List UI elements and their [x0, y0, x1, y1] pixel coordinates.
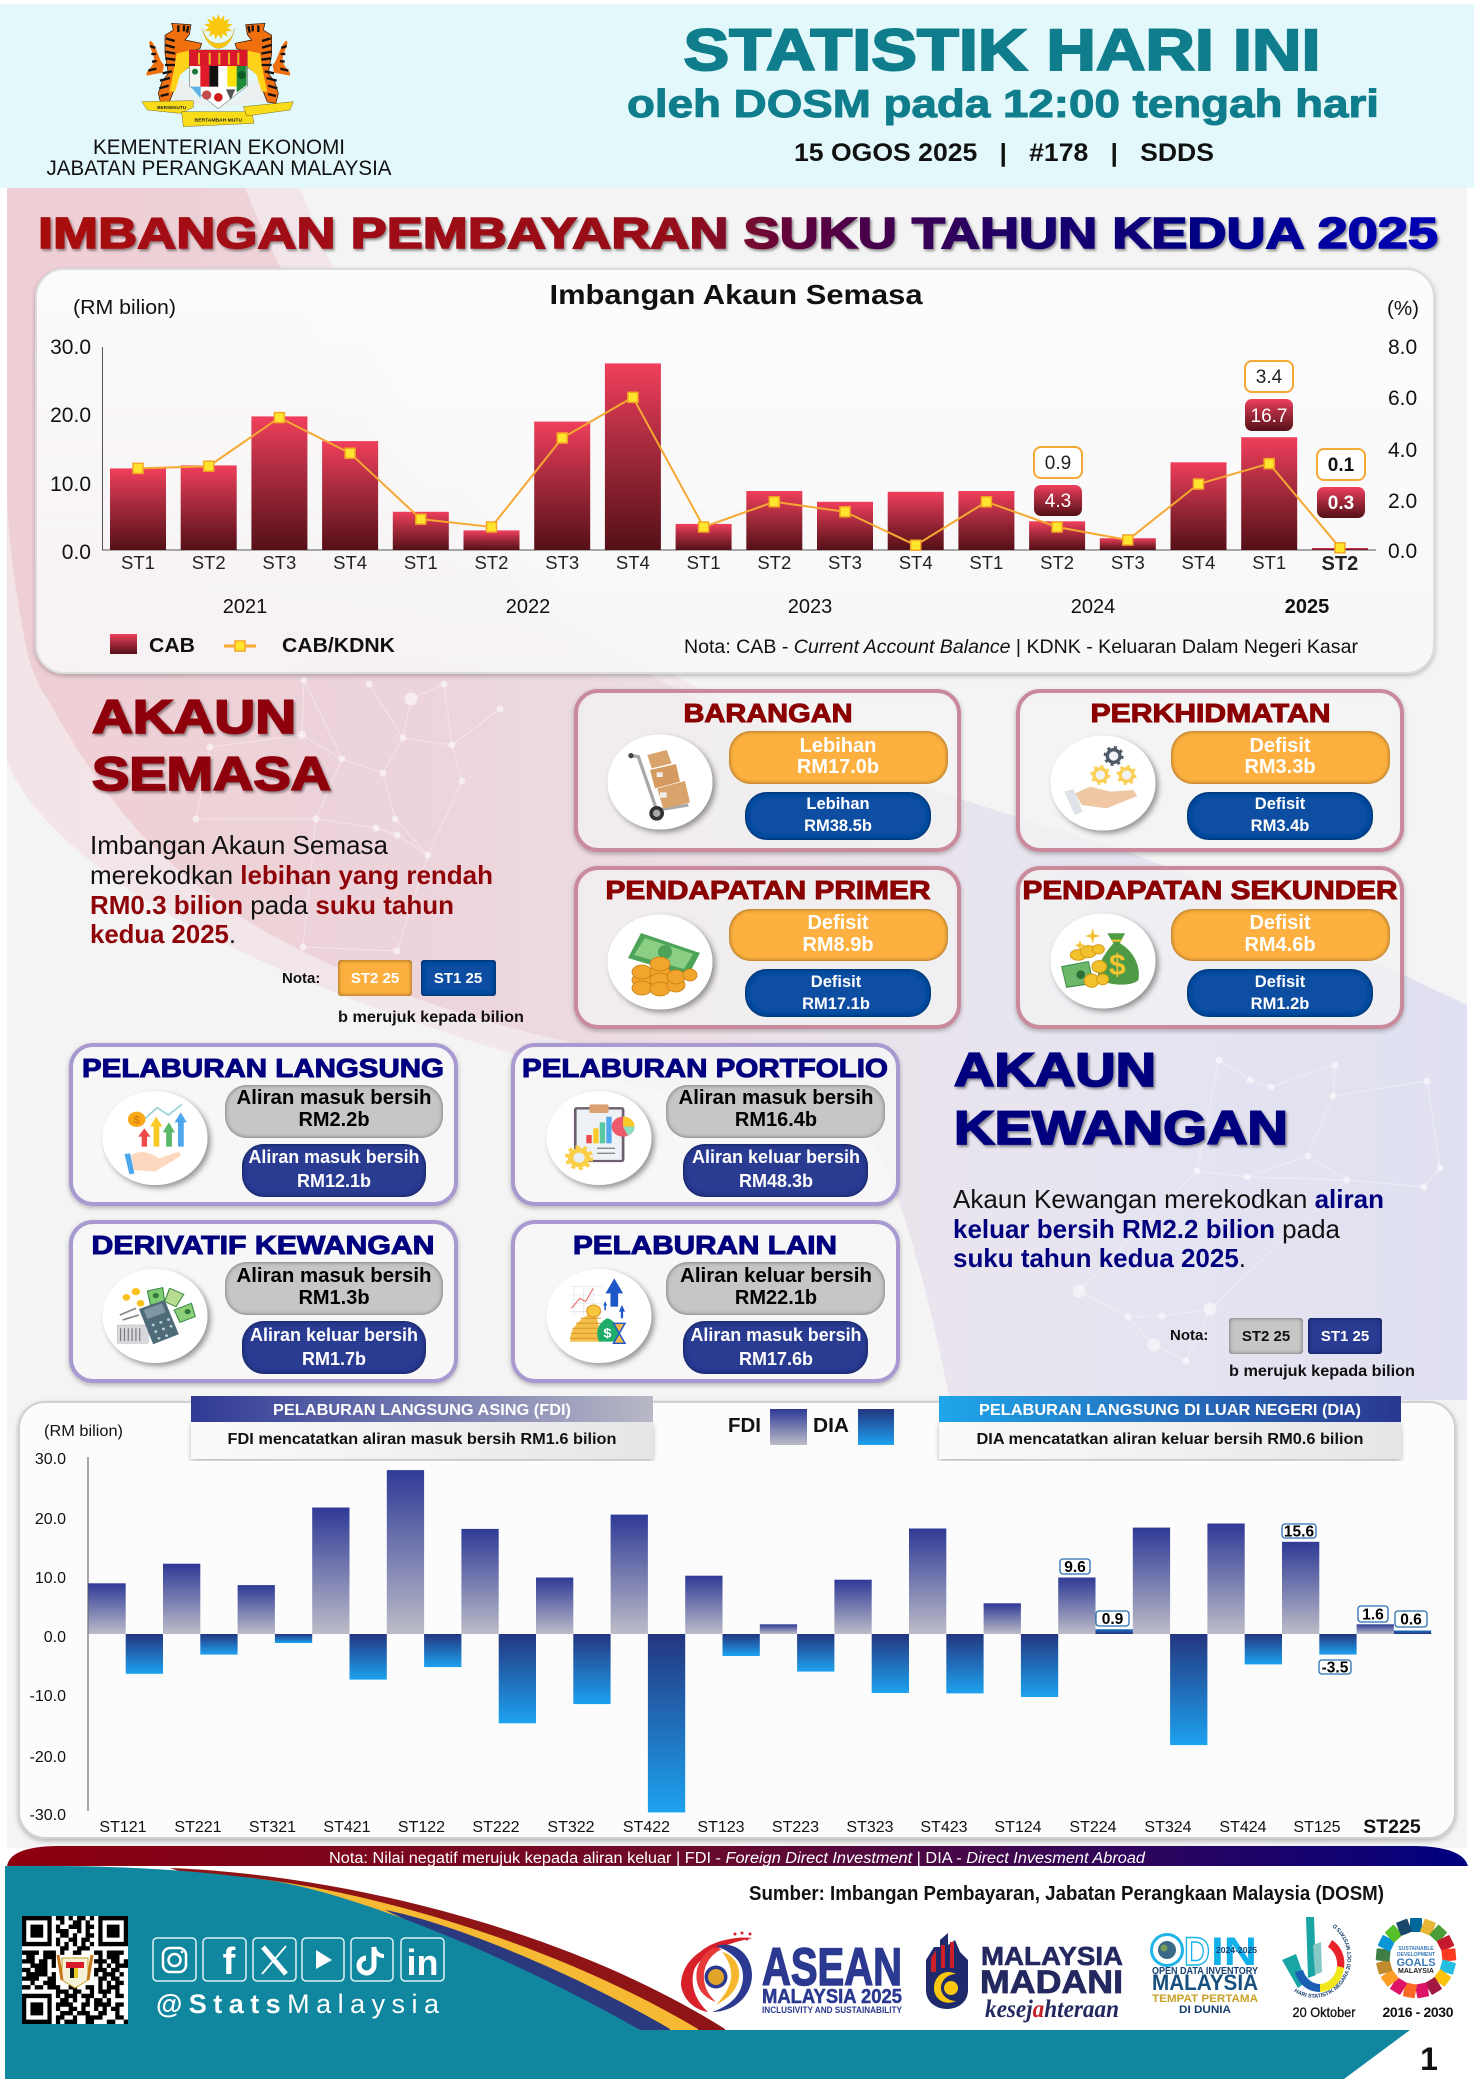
legend [728, 1409, 894, 1445]
quarter labels: ST4 [616, 552, 650, 573]
note band: Nota: Nilai negatif merujuk kepada aliran keluar | FDI - Foreign Direct Investment | DIA - Direct Invesment Abroad [329, 1850, 1146, 1867]
quarter labels: ST322 [547, 1819, 595, 1836]
right axis labels: 0.0 [1388, 540, 1417, 563]
icon: Malaysian coat of arms: BERTAMBAH MUTU [195, 118, 242, 124]
quarter labels: ST4 [899, 552, 933, 573]
pill: ST2 25 portfolio: RM16.4b [735, 1109, 817, 1131]
left axis unit: (RM bilion) [73, 297, 176, 319]
axis labels: 30.0 [35, 1451, 66, 1468]
heading: Akaun Semasa: AKAUN [92, 690, 296, 743]
quarter labels: ST3 [828, 552, 862, 573]
chart title: Imbangan Akaun Semasa [550, 279, 923, 310]
logo: Malaysia Madani: MALAYSIA [981, 1941, 1123, 1971]
page number: 1 [1420, 2041, 1438, 2077]
pill: ST1 25 services: Defisit [1255, 795, 1306, 813]
logo: Sustainable Development Goals: 2016 - 2030 [1382, 2004, 1454, 2020]
callout: 2024 ST2: 4.3 [1045, 491, 1071, 512]
quarter labels: ST3 [1111, 552, 1145, 573]
year labels: 2021 [223, 596, 267, 618]
pill: ST2 25 derivatives: Aliran masuk bersih [236, 1265, 432, 1287]
pill: ST1 25 primary income: RM17.1b [802, 995, 870, 1013]
logo: ODIN: D [1184, 1930, 1210, 1974]
axis labels: -10.0 [30, 1688, 66, 1705]
value labels: 1.6 [1362, 1606, 1384, 1624]
quarter labels: ST3 [545, 552, 579, 573]
qr code [22, 1916, 128, 2024]
quarter labels: ST1 [121, 552, 155, 573]
key: current account [282, 960, 524, 1026]
key: current account: b merujuk kepada bilion [338, 1009, 524, 1026]
social handle: @StatsMalaysia [156, 1989, 440, 2019]
heading: Akaun Semasa [92, 690, 331, 800]
pill: ST2 25 other investment [666, 1262, 885, 1315]
pill: ST2 25 goods [729, 731, 948, 784]
pill: ST2 25 goods: Lebihan [800, 735, 876, 757]
background texture [7, 188, 1467, 1848]
logo: ASEAN Malaysia 2025: ASEAN [762, 1938, 902, 1997]
quarter labels: ST323 [846, 1819, 894, 1836]
icon: money bag: $ [1109, 949, 1126, 982]
left axis labels: 0.0 [62, 541, 91, 564]
key: current account: ST2 25 [351, 970, 399, 987]
logo: ASEAN Malaysia 2025 [681, 1932, 902, 2015]
value labels: -3.5 [1322, 1660, 1349, 1676]
quarter labels: ST4 [333, 552, 367, 573]
pill: ST1 25 portfolio: RM48.3b [739, 1171, 813, 1191]
logo: Sustainable Development Goals [1376, 1918, 1456, 2020]
pill: ST1 25 other investment: Aliran masuk bersih [690, 1325, 862, 1345]
logo: ODIN: DI DUNIA [1179, 2004, 1231, 2016]
panel: FDI and DIA chart [19, 1396, 1455, 1838]
pill: ST1 25 direct investment: RM12.1b [297, 1171, 371, 1191]
key: financial account: b merujuk kepada bilion [1229, 1363, 1415, 1380]
key: financial account: ST1 25 [1321, 1328, 1369, 1345]
pill: ST1 25 goods: RM38.5b [804, 817, 872, 835]
quarter labels: ST321 [249, 1819, 296, 1836]
pill: ST1 25 primary income [745, 969, 931, 1017]
heading: Pendapatan Sekunder: PENDAPATAN SEKUNDER [1022, 875, 1398, 905]
quarter labels: ST423 [920, 1819, 968, 1836]
bar chart: FDI [88, 1470, 1394, 1634]
pill: ST1 25 services [1187, 792, 1373, 840]
heading: Pelaburan Portfolio: PELABURAN PORTFOLIO [522, 1053, 888, 1083]
header title: STATISTIK HARI INI [684, 18, 1320, 83]
text block: current account summary [90, 830, 493, 949]
logo: ODIN: 2024-2025 [1216, 1946, 1258, 1955]
main title: IMBANGAN PEMBAYARAN SUKU TAHUN KEDUA 2025 [38, 209, 1438, 258]
logo: ODIN: IN [1211, 1930, 1257, 1974]
pill: ST2 25 other investment: RM22.1b [735, 1287, 817, 1309]
value labels: 15.6 [1284, 1524, 1314, 1540]
legend: DIA [813, 1415, 849, 1437]
text block: current account summary: RM0.3 bilion pada suku tahun [90, 890, 454, 920]
logo: ASEAN Malaysia 2025: INCLUSIVITY AND SUSTAINABILITY [762, 2005, 902, 2015]
logo: ASEAN Malaysia 2025: MALAYSIA 2025 [762, 1986, 902, 2008]
bar chart: DIA [126, 1629, 1431, 1812]
chart note: Nota: CAB - Current Account Balance | KDNK - Keluaran Dalam Negeri Kasar [684, 637, 1359, 658]
heading: Akaun Kewangan [954, 1043, 1288, 1154]
quarter labels: ST3 [262, 552, 296, 573]
quarter labels: ST221 [174, 1819, 222, 1836]
logo: ODIN [1152, 1930, 1258, 2016]
pill: ST2 25 direct investment: RM2.2b [298, 1109, 370, 1131]
year labels: 2025 [1285, 596, 1329, 618]
pill: ST1 25 goods [745, 792, 931, 840]
text block: financial account summary [953, 1184, 1384, 1273]
quarter labels: ST2 [1322, 553, 1358, 575]
quarter labels: ST2 [475, 552, 508, 573]
right axis labels [1388, 336, 1417, 563]
DIA header box [939, 1396, 1401, 1459]
panel: current account chart [36, 269, 1434, 673]
pill: ST2 25 services: RM3.3b [1244, 756, 1316, 778]
quarter labels: ST422 [623, 1819, 670, 1836]
pill: ST1 25 portfolio [683, 1144, 868, 1197]
pill: ST2 25 secondary income [1171, 909, 1390, 961]
date: 20 Oktober [1292, 2004, 1356, 2020]
panel: Pelaburan Portfolio [513, 1045, 898, 1204]
quarter labels [121, 552, 1358, 575]
heading: Pendapatan Primer: PENDAPATAN PRIMER [606, 875, 931, 905]
legend: FDI [728, 1415, 761, 1437]
legend: CAB/KDNK [282, 635, 396, 657]
pill: ST2 25 secondary income: Defisit [1249, 912, 1311, 934]
header band [0, 4, 1474, 188]
pill: ST2 25 other investment: Aliran keluar bersih [680, 1265, 872, 1287]
pill: ST1 25 direct investment: Aliran masuk bersih [248, 1147, 420, 1167]
bar chart: CAB [110, 363, 1368, 550]
pill: ST2 25 portfolio: Aliran masuk bersih [678, 1087, 874, 1109]
year labels: 2024 [1071, 596, 1115, 618]
panel: Barangan [576, 691, 959, 850]
pill: ST1 25 secondary income: Defisit [1255, 973, 1306, 991]
source: Sumber: Imbangan Pembayaran, Jabatan Perangkaan Malaysia (DOSM) [749, 1883, 1384, 1905]
pill: ST1 25 derivatives: RM1.7b [302, 1349, 366, 1369]
quarter labels: ST4 [1182, 552, 1215, 573]
callout: 2025 ST2: 0.1 [1328, 455, 1355, 476]
callout: 2024 ST2 [1034, 447, 1082, 516]
callout: 2025 ST1 [1245, 361, 1293, 431]
heading: Pelaburan Langsung: PELABURAN LANGSUNG [82, 1053, 444, 1083]
pill: ST1 25 derivatives: Aliran keluar bersih [250, 1325, 418, 1345]
ministry name: KEMENTERIAN EKONOMI [93, 136, 345, 159]
ministry name [46, 136, 392, 180]
pill: ST2 25 primary income: Defisit [807, 912, 869, 934]
panel: Perkhidmatan [1018, 691, 1402, 850]
heading: Pelaburan Lain: PELABURAN LAIN [573, 1230, 837, 1260]
pill: ST2 25 derivatives: RM1.3b [298, 1287, 370, 1309]
icon: hand with gears [1050, 736, 1156, 830]
pill: ST1 25 other investment [683, 1321, 868, 1374]
pill: ST2 25 portfolio [666, 1085, 885, 1138]
quarter labels [99, 1816, 1421, 1838]
key: financial account [1170, 1318, 1415, 1380]
axis labels: 0.0 [44, 1629, 66, 1646]
pill: ST2 25 secondary income: RM4.6b [1244, 934, 1316, 956]
text block: financial account summary: suku tahun kedua 2025. [953, 1243, 1246, 1273]
callout: 2025 ST1: 3.4 [1256, 367, 1283, 388]
icon: coins and arrow: $ [603, 1326, 612, 1340]
logo: Malaysia Madani [926, 1933, 1123, 2023]
logo: Malaysia Madani: kesejahteraan [985, 1996, 1119, 2023]
axis labels: -30.0 [30, 1807, 66, 1824]
pill: ST2 25 goods: RM17.0b [797, 756, 879, 778]
axis labels: 20.0 [35, 1511, 66, 1528]
key: current account: ST1 25 [434, 970, 482, 987]
left axis labels [50, 336, 91, 564]
icon: Malaysian coat of arms [142, 14, 293, 127]
pill: ST1 25 direct investment [242, 1144, 426, 1197]
axis labels [30, 1451, 66, 1824]
ministry name: JABATAN PERANGKAAN MALAYSIA [46, 157, 392, 180]
quarter labels: ST122 [398, 1819, 445, 1836]
heading: Akaun Kewangan: KEWANGAN [954, 1101, 1288, 1154]
value labels: 0.9 [1102, 1611, 1124, 1628]
legend [110, 634, 396, 657]
pill: ST1 25 portfolio: Aliran keluar bersih [692, 1147, 860, 1167]
note band [7, 1846, 1468, 1867]
quarter labels: ST1 [969, 552, 1003, 573]
quarter labels: ST123 [697, 1819, 745, 1836]
panel: Pelaburan Lain [513, 1222, 898, 1381]
quarter labels: ST324 [1144, 1819, 1192, 1836]
quarter labels: ST124 [994, 1819, 1042, 1836]
logo: Sustainable Development Goals: DEVELOPMENT [1397, 1952, 1435, 1958]
axis unit: (RM bilion) [44, 1423, 123, 1440]
pill: ST2 25 primary income [729, 909, 948, 961]
left axis labels: 10.0 [50, 473, 91, 496]
legend: CAB [149, 635, 195, 657]
panel: Pendapatan Sekunder [1018, 868, 1402, 1027]
heading: Perkhidmatan: PERKHIDMATAN [1090, 698, 1330, 728]
logo: Hari Statistik Negara: HARI STATISTIK NEGARA 20 OCT MYSTATS DAY [1294, 1924, 1352, 1998]
DIA header box: DIA mencatatkan aliran keluar bersih RM0.6 bilion [976, 1431, 1364, 1448]
DIA header box: PELABURAN LANGSUNG DI LUAR NEGERI (DIA) [979, 1402, 1361, 1419]
left axis labels: 30.0 [50, 336, 91, 359]
value labels: 0.6 [1400, 1612, 1422, 1628]
year labels [223, 596, 1329, 618]
quarter labels: ST222 [472, 1819, 520, 1836]
quarter labels: ST421 [323, 1819, 371, 1836]
right axis labels: 4.0 [1388, 439, 1417, 462]
pill: ST2 25 primary income: RM8.9b [802, 934, 874, 956]
heading: Derivatif Kewangan: DERIVATIF KEWANGAN [92, 1230, 434, 1260]
value labels [1060, 1524, 1427, 1676]
pill: ST1 25 other investment: RM17.6b [739, 1349, 813, 1369]
right axis unit: (%) [1387, 298, 1419, 320]
icon: clipboard chart [546, 1091, 652, 1185]
heading: Akaun Kewangan: AKAUN [954, 1043, 1156, 1096]
callout: 2024 ST2: 0.9 [1045, 453, 1071, 474]
value labels: 9.6 [1064, 1559, 1086, 1576]
right axis labels: 2.0 [1388, 490, 1417, 513]
pill: ST1 25 derivatives [242, 1321, 426, 1374]
header subtitle: oleh DOSM pada 12:00 tengah hari [627, 83, 1379, 126]
quarter labels: ST2 [192, 552, 226, 573]
quarter labels: ST1 [687, 552, 721, 573]
callout: 2025 ST1: 16.7 [1251, 406, 1287, 427]
pill: ST2 25 services [1171, 731, 1390, 784]
quarter labels: ST225 [1363, 1816, 1421, 1838]
logo: Sustainable Development Goals: GOALS [1396, 1957, 1436, 1969]
pill: ST2 25 direct investment [225, 1085, 443, 1138]
icon: trolley with boxes [608, 734, 712, 830]
year labels: 2023 [788, 596, 832, 618]
icon: money bag [1050, 914, 1156, 1008]
social media icons: in [406, 1942, 438, 1983]
logo: Sustainable Development Goals: SUSTAINABLE [1398, 1946, 1434, 1952]
panel: Pendapatan Primer [576, 868, 959, 1027]
logo: ODIN: MALAYSIA [1152, 1970, 1258, 1995]
key: financial account: Nota: [1170, 1327, 1208, 1344]
text block: financial account summary: Akaun Kewangan merekodkan aliran [953, 1184, 1384, 1214]
pill: ST2 25 derivatives [225, 1262, 443, 1315]
pill: ST1 25 secondary income: RM1.2b [1251, 995, 1309, 1013]
quarter labels: ST2 [757, 552, 791, 573]
icon: coins and arrow [546, 1269, 652, 1363]
quarter labels: ST224 [1069, 1819, 1117, 1836]
issue line: 15 OGOS 2025 | #178 | SDDS [794, 139, 1214, 167]
panel: Pelaburan Langsung [71, 1045, 456, 1204]
quarter labels: ST125 [1293, 1819, 1341, 1836]
callout: 2025 ST2 [1317, 449, 1365, 518]
pill: ST1 25 goods: Lebihan [806, 795, 870, 813]
icon: growth arrows over hand [102, 1091, 208, 1185]
icon: Malaysian coat of arms: BERSEKUTU [157, 105, 187, 110]
text block: current account summary: merekodkan lebihan yang rendah [90, 860, 493, 890]
logo: ODIN: OPEN DATA INVENTORY [1152, 1965, 1258, 1977]
quarter labels: ST1 [1252, 552, 1286, 573]
quarter labels: ST424 [1219, 1819, 1267, 1836]
FDI header box: PELABURAN LANGSUNG ASING (FDI) [273, 1402, 571, 1419]
panel: Derivatif Kewangan [71, 1222, 456, 1381]
FDI header box: FDI mencatatkan aliran masuk bersih RM1.6 bilion [228, 1431, 616, 1448]
logo: Sustainable Development Goals: MALAYSIA [1398, 1968, 1434, 1975]
quarter labels: ST121 [99, 1819, 147, 1836]
pill: ST2 25 direct investment: Aliran masuk bersih [236, 1087, 432, 1109]
text block: financial account summary: keluar bersih RM2.2 bilion pada [953, 1214, 1341, 1244]
right axis labels: 6.0 [1388, 387, 1417, 410]
pill: ST2 25 services: Defisit [1249, 735, 1311, 757]
right axis labels: 8.0 [1388, 336, 1417, 359]
quarter labels: ST1 [404, 552, 438, 573]
pill: ST1 25 services: RM3.4b [1251, 817, 1309, 835]
year labels: 2022 [506, 596, 550, 618]
key: current account: Nota: [282, 970, 320, 987]
heading: Akaun Semasa: SEMASA [92, 747, 331, 800]
icon: growth arrows over hand: $ [133, 1115, 141, 1126]
social media icons: f [223, 1941, 236, 1983]
icon: calculator and cash [102, 1269, 208, 1363]
FDI header box [191, 1396, 653, 1459]
key: financial account: ST2 25 [1242, 1328, 1290, 1345]
logo: Malaysia Madani: MADANI [980, 1964, 1123, 2000]
line: CAB/KDNK [133, 392, 1345, 553]
quarter labels: ST2 [1040, 552, 1074, 573]
pill: ST1 25 secondary income [1187, 969, 1373, 1017]
axis labels: 10.0 [35, 1570, 66, 1587]
icon: cash and coins [608, 914, 712, 1010]
pill: ST1 25 primary income: Defisit [811, 973, 862, 991]
social media icons [153, 1938, 444, 1983]
text block: current account summary: Imbangan Akaun Semasa [90, 830, 389, 860]
heading: Barangan: BARANGAN [684, 698, 852, 728]
logo: ODIN: TEMPAT PERTAMA [1152, 1993, 1258, 2005]
callout: 2025 ST2: 0.3 [1328, 493, 1354, 514]
axis labels: -20.0 [30, 1749, 66, 1766]
quarter labels: ST223 [772, 1819, 819, 1836]
left axis labels: 20.0 [50, 404, 91, 427]
text block: current account summary: kedua 2025. [90, 919, 236, 949]
